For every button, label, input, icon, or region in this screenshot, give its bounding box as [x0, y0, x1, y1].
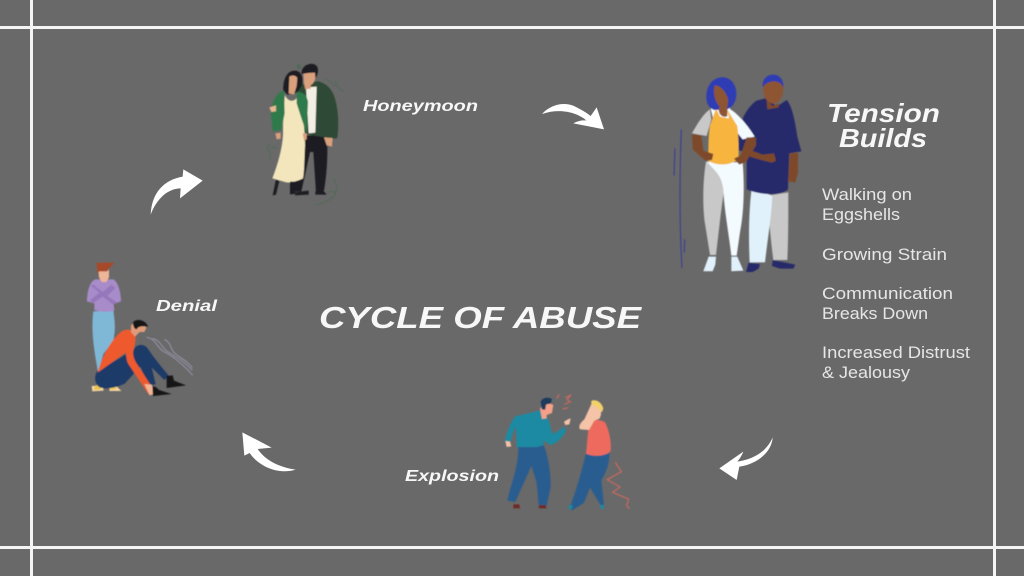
illustration: denial figures [87, 263, 193, 396]
list: tension builds signs: Breaks Down [822, 304, 928, 323]
list: tension builds signs: Walking on [822, 185, 912, 204]
list: tension builds signs: Eggshells [822, 205, 900, 224]
heading: tension builds [827, 98, 940, 153]
title: CYCLE OF ABUSE [319, 300, 643, 335]
illustration: explosion couple [505, 394, 629, 510]
list: tension builds signs: Increased Distrust [822, 343, 970, 362]
arrow: honeymoon to tension builds [542, 104, 604, 129]
list: tension builds signs: Communication [822, 284, 953, 303]
label: denial: Denial [156, 298, 218, 315]
label: honeymoon: Honeymoon [363, 98, 478, 115]
label: explosion: Explosion [405, 468, 499, 485]
heading: tension builds: Builds [839, 123, 927, 153]
list: tension builds signs [822, 185, 970, 382]
illustration: tension builds couple [674, 75, 801, 272]
illustration: honeymoon couple [267, 63, 345, 205]
arrow: tension builds to explosion [719, 437, 773, 480]
heading: tension builds: Tension [827, 98, 940, 128]
arrow: explosion to denial [242, 432, 296, 471]
list: tension builds signs: Growing Strain [822, 245, 947, 264]
arrow: denial to honeymoon [151, 169, 203, 215]
list: tension builds signs: & Jealousy [822, 363, 911, 382]
